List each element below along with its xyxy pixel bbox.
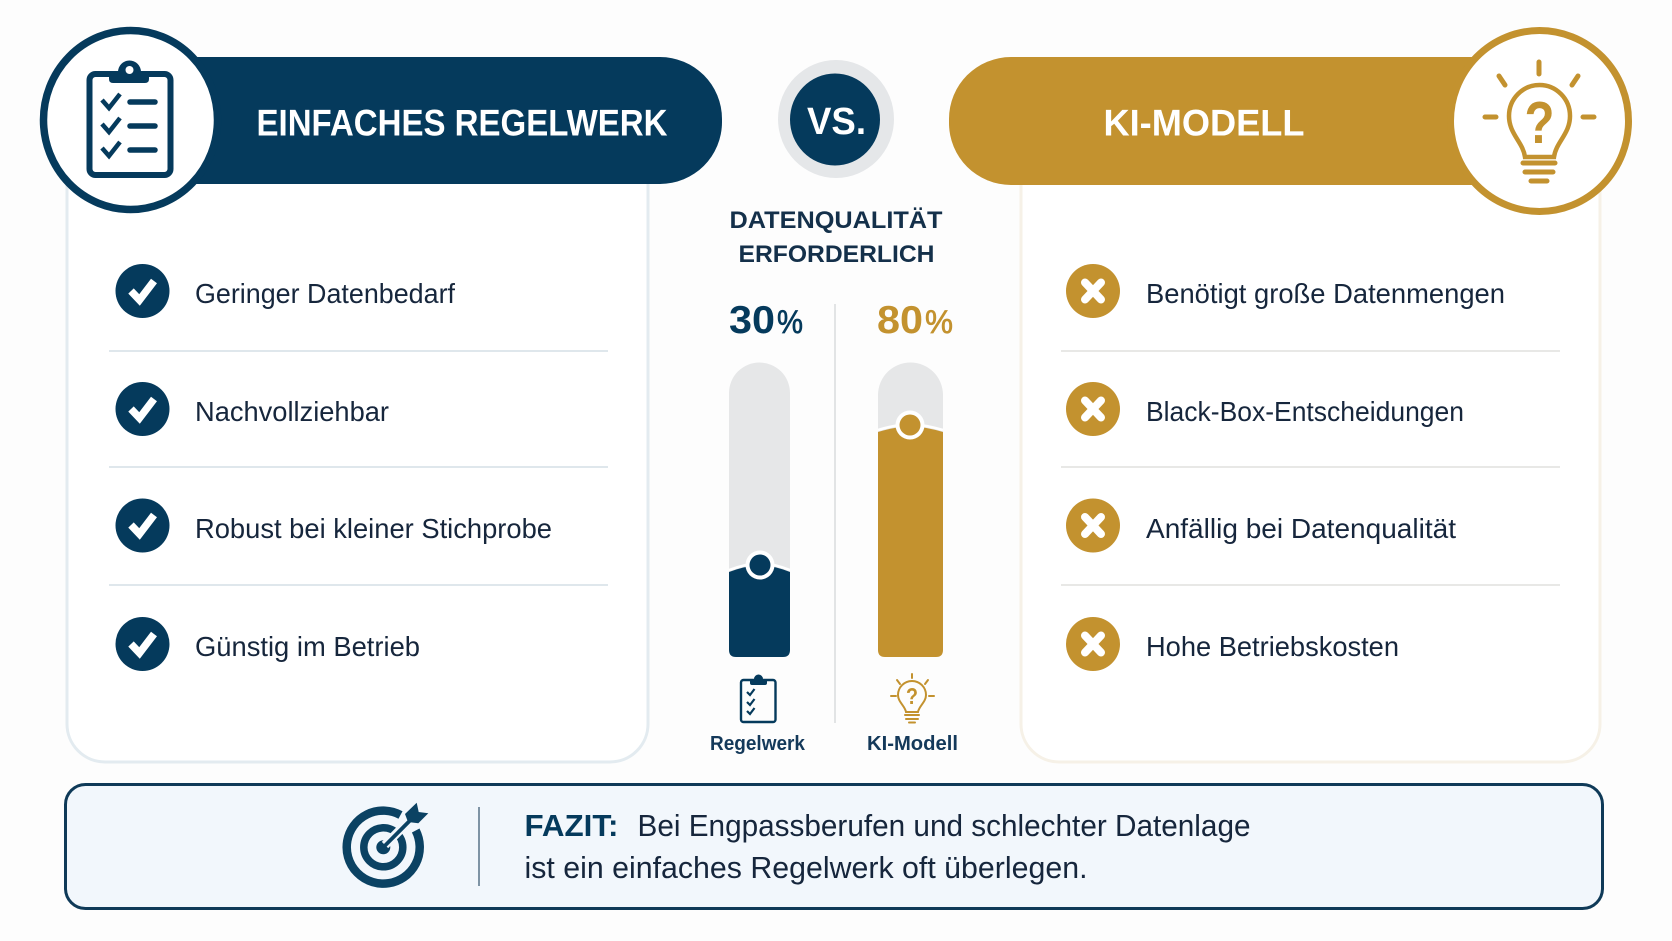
heading: Datenqualität erforderlich (730, 207, 943, 268)
icon: target with arrow (347, 803, 428, 884)
header title: KI-MODELL (1104, 102, 1304, 144)
icon: light bulb with question mark: ? (1524, 90, 1554, 156)
bar: Regelwerk 30%: % (777, 304, 803, 340)
row: Benötigt große Datenmengen (1066, 264, 1505, 318)
conclusion text: Bei Engpassberufen und schlechter Datenlage (638, 808, 1250, 843)
row: Robust bei kleiner Stichprobe (116, 498, 552, 552)
row: Benötigt große Datenmengen: Benötigt große Datenmengen (1146, 278, 1505, 309)
icon: small clipboard (741, 674, 776, 722)
row: Geringer Datenbedarf: Geringer Datenbedarf (195, 278, 455, 309)
chart: Datenqualität bars (710, 299, 958, 755)
VS badge (778, 60, 894, 178)
icon: clipboard checklist (90, 60, 170, 175)
conclusion text (524, 808, 1250, 885)
header: Einfaches Regelwerk (44, 30, 722, 210)
row: Hohe Betriebskosten: Hohe Betriebskosten (1146, 631, 1399, 662)
row: Anfällig bei Datenqualität: Anfällig bei Datenqualität (1146, 513, 1456, 544)
header title: EINFACHES REGELWERK (256, 102, 668, 144)
row: Black-Box-Entscheidungen (1066, 382, 1464, 436)
icon: small light bulb: ? (906, 683, 918, 709)
panel: KI-Modell (1021, 140, 1600, 762)
bar: KI-Modell 80%: 80 (877, 299, 923, 342)
row: Black-Box-Entscheidungen: Black-Box-Entscheidungen (1146, 396, 1464, 427)
header: KI-Modell (949, 30, 1628, 212)
heading: Datenqualität erforderlich: ERFORDERLICH (738, 241, 934, 268)
row: Günstig im Betrieb: Günstig im Betrieb (195, 631, 420, 662)
heading: Datenqualität erforderlich: DATENQUALITÄT (730, 207, 943, 234)
bar: Regelwerk 30%: 30 (729, 299, 775, 342)
row: Geringer Datenbedarf (116, 264, 455, 318)
panel: Einfaches Regelwerk (67, 140, 648, 762)
icon: light bulb with question mark (1485, 62, 1594, 181)
row: Nachvollziehbar: Nachvollziehbar (195, 396, 389, 427)
bar: Regelwerk 30% (729, 299, 803, 657)
label: Regelwerk: Regelwerk (710, 733, 806, 755)
row: Günstig im Betrieb (116, 617, 420, 671)
icon: small light bulb (891, 674, 934, 722)
row: Hohe Betriebskosten (1066, 617, 1399, 671)
label: KI-Modell: KI-Modell (867, 733, 958, 755)
row: Anfällig bei Datenqualität (1066, 498, 1456, 552)
bar: KI-Modell 80%: % (925, 304, 953, 340)
callout: Fazit (66, 784, 1602, 908)
VS badge: VS. (807, 101, 866, 143)
conclusion text: FAZIT: (524, 808, 618, 843)
bar: KI-Modell 80% (877, 299, 953, 657)
conclusion text: ist ein einfaches Regelwerk oft überlegen. (524, 850, 1088, 885)
row: Nachvollziehbar (116, 382, 389, 436)
row: Robust bei kleiner Stichprobe: Robust bei kleiner Stichprobe (195, 513, 552, 544)
